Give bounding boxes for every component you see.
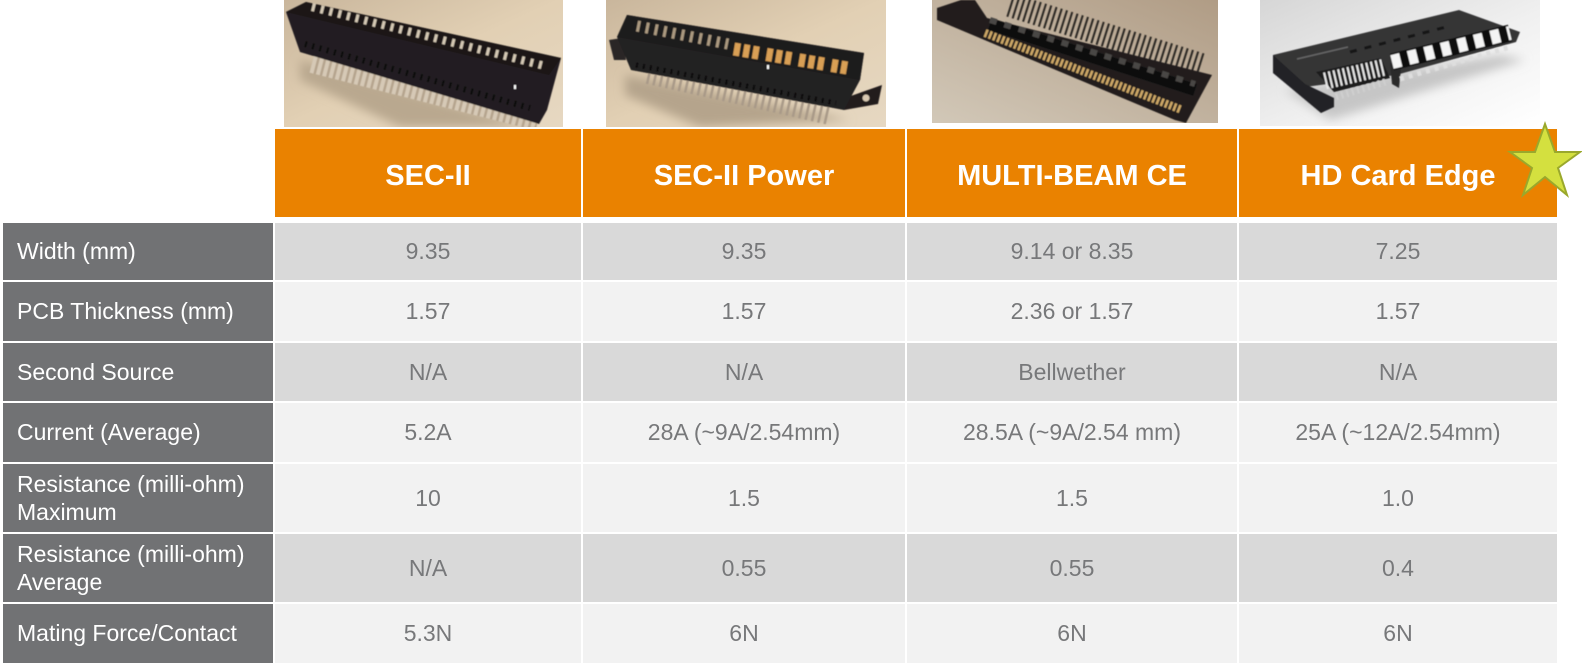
value: SEC-II mating force: 5.3N — [404, 620, 452, 646]
photo: MULTI-BEAM CE connector — [932, 0, 1218, 123]
value: SEC-II average resistance: N/A — [409, 554, 447, 580]
value: MULTI-BEAM CE width: 9.14 or 8.35 — [1011, 238, 1133, 264]
value: SEC-II thickness: 1.57 — [406, 298, 450, 324]
value: SEC-II current — [275, 403, 581, 462]
value: HD Card Edge width — [1239, 223, 1557, 280]
value: HD Card Edge average resistance — [1239, 534, 1557, 602]
row label: Resistance maximum: Maximum — [17, 499, 117, 525]
value: MULTI-BEAM CE mating force: 6N — [1057, 620, 1087, 646]
value: SEC-II Power thickness: 1.57 — [722, 298, 766, 324]
value: HD Card Edge width: 7.25 — [1376, 238, 1420, 264]
row label: Width: Width (mm) — [17, 238, 136, 264]
value: SEC-II Power mating force: 6N — [729, 620, 759, 646]
row label: Resistance average — [3, 534, 273, 602]
value: HD Card Edge mating force — [1239, 604, 1557, 663]
value: HD Card Edge mating force: 6N — [1383, 620, 1413, 646]
value: SEC-II Power second source — [583, 343, 905, 401]
row label: Resistance maximum — [3, 464, 273, 532]
value: SEC-II Power average resistance — [583, 534, 905, 602]
row label: Mating Force: Mating Force/Contact — [17, 620, 237, 646]
value: MULTI-BEAM CE second source: Bellwether — [1018, 358, 1126, 384]
value: SEC-II current: 5.2A — [404, 419, 452, 445]
header: HD Card Edge — [1239, 129, 1557, 217]
value: SEC-II max resistance — [275, 464, 581, 532]
value: MULTI-BEAM CE second source — [907, 343, 1237, 401]
photo: SEC-II connector — [284, 0, 563, 127]
value: SEC-II second source: N/A — [409, 358, 447, 384]
value: SEC-II Power current — [583, 403, 905, 462]
row label: Current: Current (Average) — [17, 419, 201, 445]
value: HD Card Edge second source — [1239, 343, 1557, 401]
value: HD Card Edge thickness: 1.57 — [1376, 298, 1420, 324]
row label: Mating Force — [3, 604, 273, 663]
row label: PCB Thickness: PCB Thickness (mm) — [17, 298, 234, 324]
row label: PCB Thickness — [3, 282, 273, 341]
value: SEC-II Power max resistance: 1.5 — [728, 484, 760, 510]
value: SEC-II width: 9.35 — [406, 238, 450, 264]
value: MULTI-BEAM CE current: 28.5A (~9A/2.54 mm) — [963, 419, 1181, 445]
value: MULTI-BEAM CE mating force — [907, 604, 1237, 663]
value: HD Card Edge current — [1239, 403, 1557, 462]
row label: Resistance average: Average — [17, 569, 102, 595]
icon: green star — [1507, 121, 1582, 198]
value: SEC-II Power second source: N/A — [725, 358, 763, 384]
value: MULTI-BEAM CE average resistance: 0.55 — [1050, 554, 1094, 580]
value: SEC-II Power mating force — [583, 604, 905, 663]
value: HD Card Edge average resistance: 0.4 — [1382, 554, 1414, 580]
header: SEC-II Power: SEC-II Power — [654, 160, 834, 192]
value: MULTI-BEAM CE max resistance — [907, 464, 1237, 532]
value: MULTI-BEAM CE thickness — [907, 282, 1237, 341]
value: HD Card Edge max resistance — [1239, 464, 1557, 532]
value: SEC-II Power current: 28A (~9A/2.54mm) — [648, 419, 840, 445]
value: SEC-II Power width: 9.35 — [722, 238, 766, 264]
value: SEC-II max resistance: 10 — [415, 484, 441, 510]
value: SEC-II average resistance — [275, 534, 581, 602]
value: HD Card Edge max resistance: 1.0 — [1382, 484, 1414, 510]
header: MULTI-BEAM CE — [907, 129, 1237, 217]
header: SEC-II Power — [583, 129, 905, 217]
value: SEC-II thickness — [275, 282, 581, 341]
value: SEC-II Power thickness — [583, 282, 905, 341]
value: HD Card Edge current: 25A (~12A/2.54mm) — [1295, 419, 1501, 445]
value: SEC-II Power average resistance: 0.55 — [722, 554, 766, 580]
header: SEC-II — [275, 129, 581, 217]
header: SEC-II: SEC-II — [385, 160, 471, 192]
value: HD Card Edge thickness — [1239, 282, 1557, 341]
value: MULTI-BEAM CE width — [907, 223, 1237, 280]
photo: HD Card Edge connector — [1260, 0, 1540, 126]
value: HD Card Edge second source: N/A — [1379, 358, 1417, 384]
row label: Current — [3, 403, 273, 462]
value: MULTI-BEAM CE thickness: 2.36 or 1.57 — [1011, 298, 1133, 324]
value: SEC-II Power max resistance — [583, 464, 905, 532]
header: HD Card Edge: HD Card Edge — [1300, 160, 1495, 192]
value: SEC-II width — [275, 223, 581, 280]
value: MULTI-BEAM CE max resistance: 1.5 — [1056, 484, 1088, 510]
value: SEC-II mating force — [275, 604, 581, 663]
row label: Second Source: Second Source — [17, 359, 174, 385]
row label: Resistance average: Resistance (milli-ohm) — [17, 540, 244, 566]
row label: Second Source — [3, 343, 273, 401]
value: SEC-II second source — [275, 343, 581, 401]
photo: SEC-II Power connector — [606, 0, 886, 127]
row label: Resistance maximum: Resistance (milli-ohm) — [17, 470, 244, 496]
value: MULTI-BEAM CE current — [907, 403, 1237, 462]
header: MULTI-BEAM CE: MULTI-BEAM CE — [957, 160, 1187, 192]
value: SEC-II Power width — [583, 223, 905, 280]
row label: Width — [3, 223, 273, 280]
value: MULTI-BEAM CE average resistance — [907, 534, 1237, 602]
